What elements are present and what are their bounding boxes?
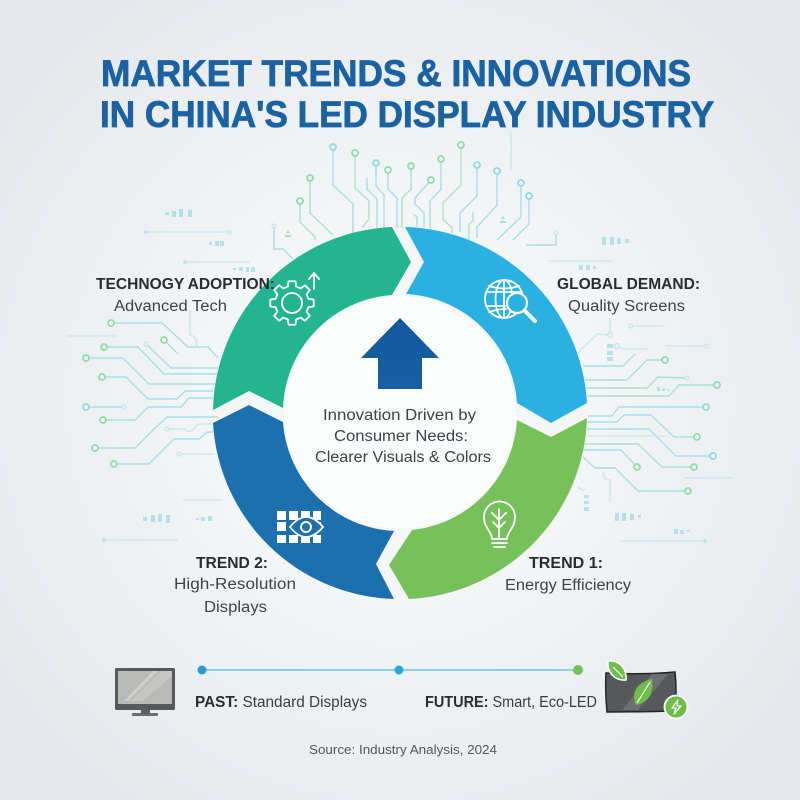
label: global demand (557, 276, 700, 315)
timeline (198, 665, 583, 675)
label: trend 1 (505, 555, 631, 594)
icon: globe with magnifier (485, 280, 535, 321)
circuit traces: top (272, 132, 558, 259)
icon: pixel grid with eye (277, 511, 323, 543)
circuit traces: right (548, 261, 732, 543)
label: trend 2: High-Resolution (174, 576, 296, 593)
decorative pixel blocks (143, 209, 690, 534)
segment: trend 1 (389, 418, 587, 599)
label: trend 2: Displays (204, 599, 267, 616)
label: trend 2: TREND 2: (196, 555, 268, 572)
label: technology adoption (96, 276, 275, 315)
segment: global demand (405, 227, 587, 423)
icon: light bulb with leaf (484, 502, 515, 547)
label: trend 2 (174, 555, 296, 616)
center text: Clearer Visuals & Colors (315, 449, 491, 466)
center text: Innovation Driven by (323, 407, 476, 424)
label: future: FUTURE: Smart, Eco-LED (425, 694, 597, 711)
title: MARKET TRENDS & INNOVATIONS (101, 52, 691, 94)
label: trend 1: TREND 1: (529, 555, 603, 572)
label: past: PAST: Standard Displays (195, 694, 367, 711)
center panel (284, 296, 516, 528)
segment: technology adoption (213, 227, 411, 410)
icon: gear with arrow (270, 273, 319, 325)
label: technology adoption: Advanced Tech (114, 298, 227, 315)
icon: up arrow (361, 318, 439, 389)
icon: eco smart display (606, 661, 688, 718)
label: global demand: GLOBAL DEMAND: (557, 276, 700, 293)
panel: cycle ring (213, 227, 587, 599)
label: technology adoption: TECHNOGY ADOPTION: (96, 276, 275, 293)
source note: Source: Industry Analysis, 2024 (309, 743, 497, 757)
segment: trend 2 (213, 405, 394, 599)
center text (315, 407, 491, 466)
center text: Consumer Needs: (334, 428, 468, 445)
circuit traces: left (68, 230, 250, 542)
icon: old monitor (115, 668, 175, 716)
title: IN CHINA'S LED DISPLAY INDUSTRY (100, 93, 714, 135)
label: global demand: Quality Screens (568, 298, 685, 315)
title (100, 52, 714, 135)
label: trend 1: Energy Efficiency (505, 577, 631, 594)
